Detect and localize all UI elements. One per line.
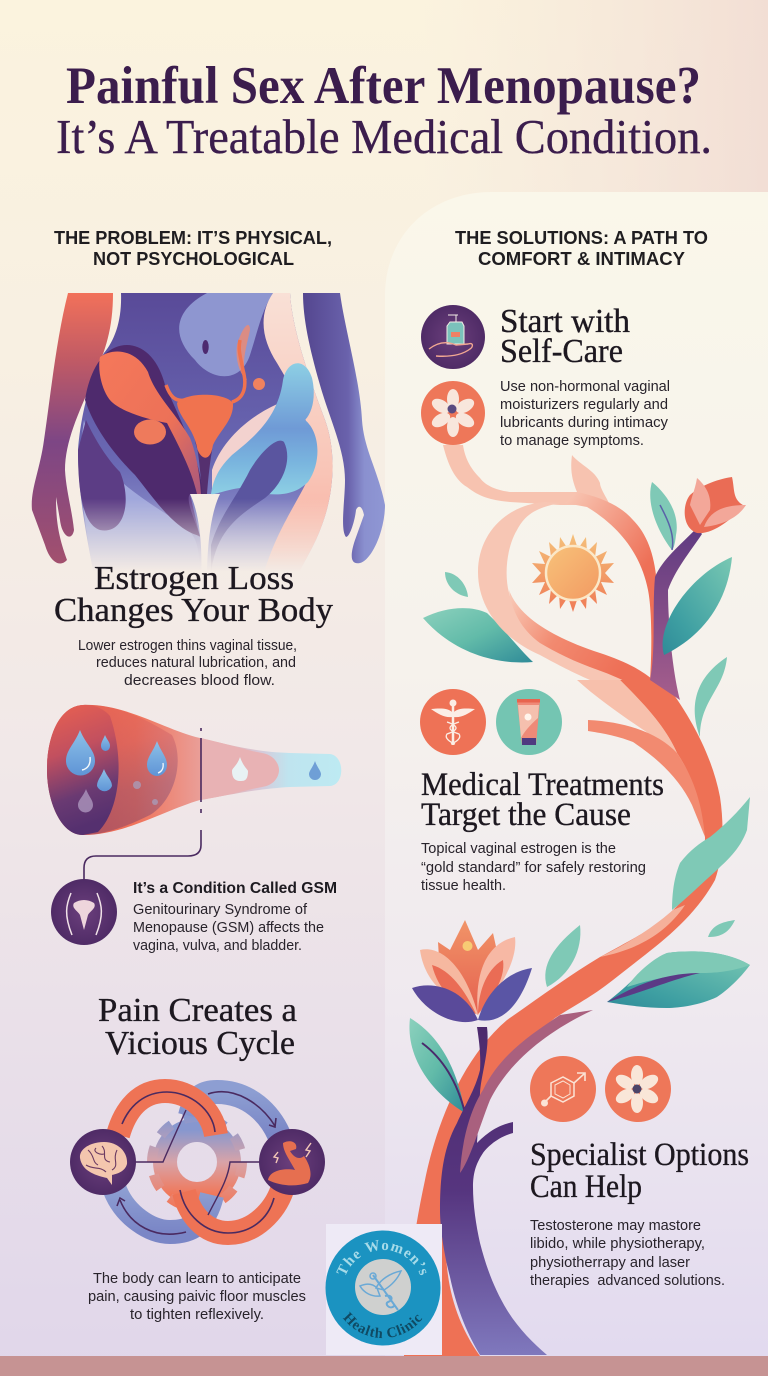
peach swirl loop (478, 502, 677, 753)
mauve band (460, 1010, 593, 1173)
logo: The Women's Health Clinic: The Women’s (336, 1240, 426, 1276)
blue ring segments (190, 1092, 279, 1135)
text: specialist body: physiotherrapy and laser (530, 1255, 690, 1271)
heading: vicious cycle (98, 992, 297, 1062)
logo: The Women's Health Clinic (326, 1224, 442, 1355)
illustration: female torso with pelvic anatomy (32, 293, 385, 580)
text: GSM callout: Genitourinary Syndrome of (133, 902, 308, 918)
light blue blob (211, 363, 317, 494)
flower: lower lotus (412, 920, 532, 1022)
text: GSM callout (133, 880, 337, 954)
text: self-care body: to manage symptoms. (500, 433, 644, 449)
right arm (303, 293, 385, 563)
text: GSM callout: Menopause (GSM) affects the (133, 920, 324, 936)
coral inner swirl (509, 590, 670, 700)
text: GSM callout: It’s a Condition Called GSM (133, 880, 337, 897)
diagram: pain cycle (70, 1091, 325, 1234)
text: cycle explanation: The body can learn to anticipate (93, 1271, 301, 1287)
purple stem with branches (650, 528, 702, 700)
heading: medical treatments (421, 767, 664, 833)
heading: medical treatments: Target the Cause (421, 797, 631, 833)
icon: flower badge (421, 381, 485, 445)
diagram: tissue thinning funnel (47, 705, 341, 880)
illustration: growing vine (404, 445, 750, 1356)
gear (165, 1130, 229, 1194)
heading: the problem: NOT PSYCHOLOGICAL (93, 248, 294, 269)
coral main trunk (404, 680, 722, 1356)
torso (78, 293, 333, 580)
text: medical body: “gold standard” for safely restoring (421, 860, 646, 876)
peach ribbon neck and bud (443, 445, 610, 505)
heading: self-care: Start with (500, 303, 630, 340)
text: self-care body (500, 379, 670, 449)
text: estrogen explanation (78, 638, 297, 689)
text: estrogen explanation: reduces natural lubrication, and (96, 655, 296, 671)
heading: self-care: Self-Care (500, 333, 623, 370)
heading: the solutions: COMFORT & INTIMACY (478, 248, 686, 269)
icon: flower badge 2 (605, 1056, 671, 1122)
icon: testosterone molecule badge (530, 1056, 596, 1122)
heading: vicious cycle: Vicious Cycle (105, 1025, 295, 1062)
title (56, 57, 712, 164)
heading: the solutions (455, 227, 708, 269)
heading: the problem: THE PROBLEM: IT’S PHYSICAL, (54, 227, 332, 248)
heading: specialist options (530, 1137, 749, 1205)
icon: pump bottle in hand (421, 305, 485, 369)
text: specialist body: libido, while physiotherapy, (530, 1236, 705, 1252)
icon: caduceus badge (420, 689, 486, 755)
water drops (66, 730, 95, 776)
icon: cream tube badge (496, 689, 562, 755)
leaves behind the ribbon (445, 572, 468, 597)
right pink side (262, 293, 333, 580)
coral upper band (565, 492, 663, 680)
heading: specialist options: Can Help (530, 1169, 642, 1205)
uterus (177, 394, 233, 458)
text: self-care body: lubricants during intimacy (500, 415, 669, 431)
text: medical body: Topical vaginal estrogen is the (421, 841, 616, 857)
coral branch (588, 720, 705, 837)
logo: The Women's Health Clinic: Health Clinic (342, 1312, 422, 1338)
text: self-care body: Use non-hormonal vaginal (500, 379, 670, 395)
text: specialist body: Testosterone may mastore (530, 1218, 701, 1234)
text: cycle explanation: to tighten reflexively. (130, 1307, 264, 1323)
text: estrogen explanation: Lower estrogen thins vaginal tissue, (78, 638, 297, 654)
coral reproductive lobe (99, 351, 201, 494)
left arm (32, 293, 113, 564)
lower leaves (672, 797, 750, 910)
purple trunk (440, 1027, 547, 1355)
arrows and lines (122, 1092, 215, 1132)
text: specialist body: therapies advanced solutions. (530, 1273, 725, 1289)
heading: self-care (500, 303, 630, 370)
footer bar (0, 1356, 768, 1376)
pale fold (212, 404, 276, 488)
text: cycle explanation: pain, causing paivic floor muscles (88, 1289, 306, 1305)
panel: solutions background (385, 192, 768, 1356)
heading: estrogen loss: Changes Your Body (54, 592, 333, 629)
heading: medical treatments: Medical Treatments (421, 767, 664, 803)
text: medical body: tissue health. (421, 878, 506, 894)
upper leaves (650, 482, 677, 550)
text: self-care body: moisturizers regularly and (500, 397, 668, 413)
text: cycle explanation (88, 1271, 306, 1323)
lavender belly (179, 293, 273, 376)
icon: sun (532, 534, 614, 612)
peach wedge on trunk (577, 680, 677, 753)
heading: vicious cycle: Pain Creates a (98, 992, 297, 1029)
divider and connector line (84, 728, 201, 880)
heading: the problem (54, 227, 332, 269)
heading: estrogen loss (54, 560, 333, 629)
text: estrogen explanation: decreases blood flow. (124, 673, 275, 689)
title: It’s A Treatable Medical Condition. (56, 109, 712, 164)
icon: uterus badge (51, 879, 117, 945)
coral ring segments (118, 1091, 216, 1135)
text: specialist body (530, 1218, 725, 1289)
heading: estrogen loss: Estrogen Loss (94, 560, 294, 597)
heading: the solutions: THE SOLUTIONS: A PATH TO (455, 227, 708, 248)
heading: specialist options: Specialist Options (530, 1137, 749, 1173)
peach tail inside trunk (600, 905, 685, 957)
flower: top right bud (685, 477, 746, 533)
icon: flexed arm (259, 1129, 325, 1195)
title: Painful Sex After Menopause? (66, 57, 701, 115)
text: medical body (421, 841, 646, 894)
icon: brain (70, 1129, 136, 1195)
text: GSM callout: vagina, vulva, and bladder. (133, 938, 302, 954)
